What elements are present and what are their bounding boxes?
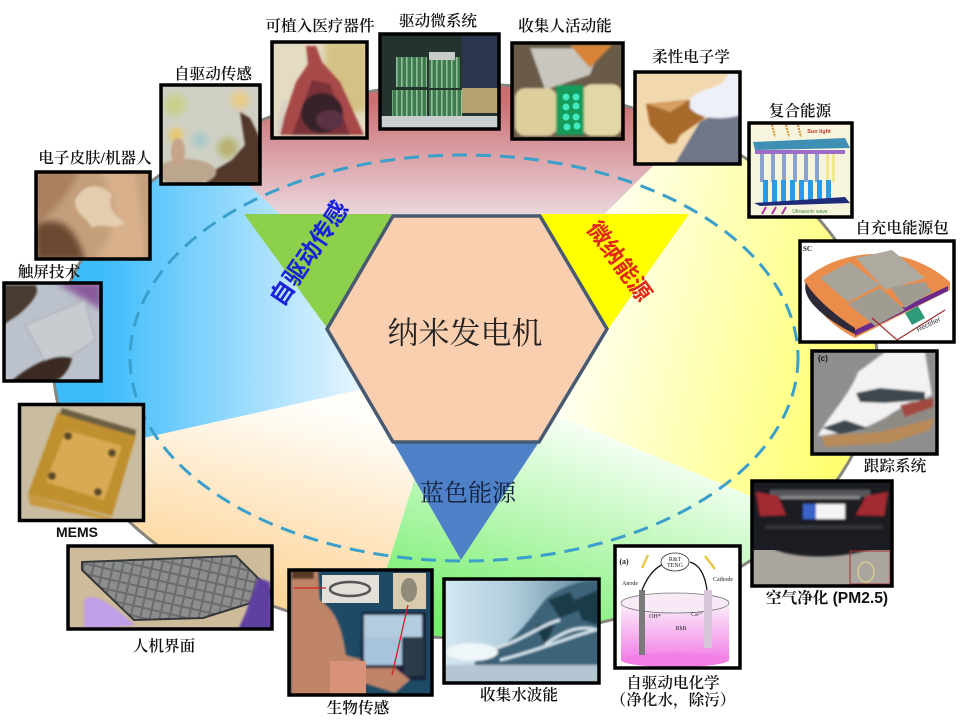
panel: self-charging power pack xyxy=(799,218,955,343)
panel: harvesting water wave energy xyxy=(443,578,600,704)
photo xyxy=(162,86,258,182)
heading: 可植入医疗器件 xyxy=(265,16,375,35)
photo xyxy=(18,403,145,522)
heading: 驱动微系统 xyxy=(399,12,477,30)
label: blue energy: 蓝色能源 xyxy=(420,480,517,507)
photo xyxy=(751,480,893,587)
panel: harvesting human motion energy xyxy=(512,16,623,139)
photo xyxy=(35,171,151,260)
caption: TENG: TENG xyxy=(667,563,684,569)
sector: yellow right xyxy=(557,158,876,496)
sector: blue left xyxy=(56,177,360,438)
panel: flexible electronics xyxy=(635,47,740,164)
heading: 人机界面 xyxy=(133,637,196,655)
heading: 自驱动电化学 xyxy=(626,673,720,692)
panel: powering microsystems xyxy=(380,12,499,129)
dashed ellipse xyxy=(130,155,798,561)
wheel outline xyxy=(53,84,877,638)
panel: self-powered sensing xyxy=(156,65,261,185)
panel: MEMS xyxy=(18,403,145,540)
diagram xyxy=(614,545,741,669)
caption: sunlight: Sun light xyxy=(807,129,831,135)
central hexagon xyxy=(327,216,607,442)
photo xyxy=(512,43,623,139)
panel: electronic skin / robotics xyxy=(35,148,152,260)
caption: reactor: R&T xyxy=(669,557,681,563)
triangle: blue energy xyxy=(393,442,539,560)
heading: 跟踪系统 xyxy=(864,457,927,475)
heading: 触屏技术 xyxy=(18,263,81,281)
diagram xyxy=(799,240,955,343)
caption: cathode: Cathode xyxy=(713,577,733,583)
photo xyxy=(67,545,273,630)
heading: 空气净化 (PM2.5) xyxy=(766,588,888,607)
caption: species: OH* xyxy=(649,614,661,620)
panel: implantable medical device xyxy=(265,16,375,138)
panel: human-machine interface xyxy=(67,545,273,655)
heading: 生物传感 xyxy=(327,699,391,717)
label: micro-nano energy: 微纳能源 xyxy=(582,216,657,306)
panel: air purification xyxy=(751,480,893,607)
triangle: self-powered sensing (green) xyxy=(244,214,393,328)
heading: 自充电能源包 xyxy=(855,218,949,237)
sector: red top xyxy=(250,86,653,214)
sector wheel xyxy=(52,84,878,640)
caption: anode: Anode xyxy=(622,581,638,587)
heading: 电子皮肤/机器人 xyxy=(38,148,152,167)
central title: 纳米发电机 xyxy=(388,316,542,351)
caption: panel letter: (c) xyxy=(818,354,828,363)
photo xyxy=(635,72,740,164)
panel: tracking system xyxy=(812,350,938,475)
sector: peach bottom left xyxy=(132,407,414,610)
caption: ions: Ca²⁺ xyxy=(691,611,703,618)
label: self-powered sensing: 自驱动传感 xyxy=(264,196,355,311)
photo xyxy=(380,34,499,129)
panel: self-powered electrochemistry xyxy=(611,545,741,709)
heading: MEMS xyxy=(56,524,98,540)
heading: 自驱动传感 xyxy=(174,65,253,83)
heading: 收集水波能 xyxy=(480,685,558,704)
heading: 收集人活动能 xyxy=(518,16,612,35)
sector: green bottom xyxy=(387,416,750,636)
panel: biosensing xyxy=(288,569,433,717)
panel: touch screen xyxy=(3,263,102,382)
subheading: （净化水，除污） xyxy=(611,690,735,709)
triangle: micro-nano energy (yellow) xyxy=(540,214,689,329)
diagram xyxy=(749,122,852,217)
caption: rectifier: Rectifier xyxy=(916,316,943,334)
photo xyxy=(288,569,433,696)
heading: 复合能源 xyxy=(769,101,833,120)
photo xyxy=(3,282,102,382)
photo xyxy=(272,42,367,138)
heading: 柔性电子学 xyxy=(652,47,730,66)
caption: supercapacitor: SC xyxy=(803,245,812,253)
caption: dye: RhB xyxy=(675,626,687,632)
caption: ultrasonic: Ultrasonic wave xyxy=(792,209,828,215)
photo xyxy=(443,578,600,684)
panel: hybrid energy xyxy=(749,101,852,217)
caption: panel letter: (a) xyxy=(619,557,629,566)
